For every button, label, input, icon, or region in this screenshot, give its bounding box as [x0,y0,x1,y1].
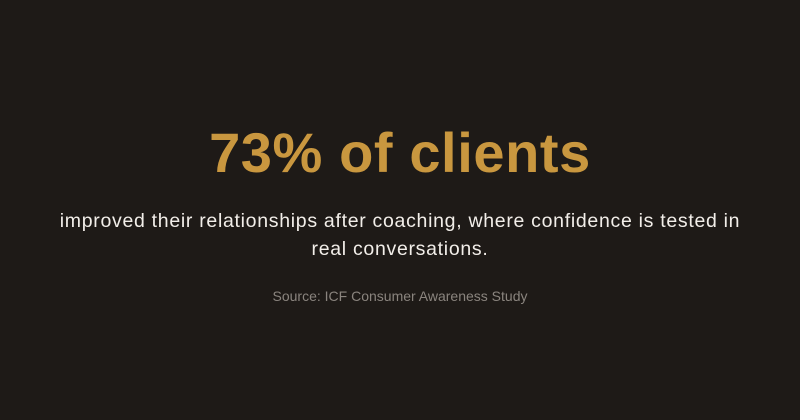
text block: description: improved their relationships after coaching, where confidence is tested in [60,210,740,232]
text block: description [60,210,740,260]
source note: Source: ICF Consumer Awareness Study [273,288,527,304]
text block: description: real conversations. [312,238,488,260]
title: 73% of clients [209,121,591,184]
